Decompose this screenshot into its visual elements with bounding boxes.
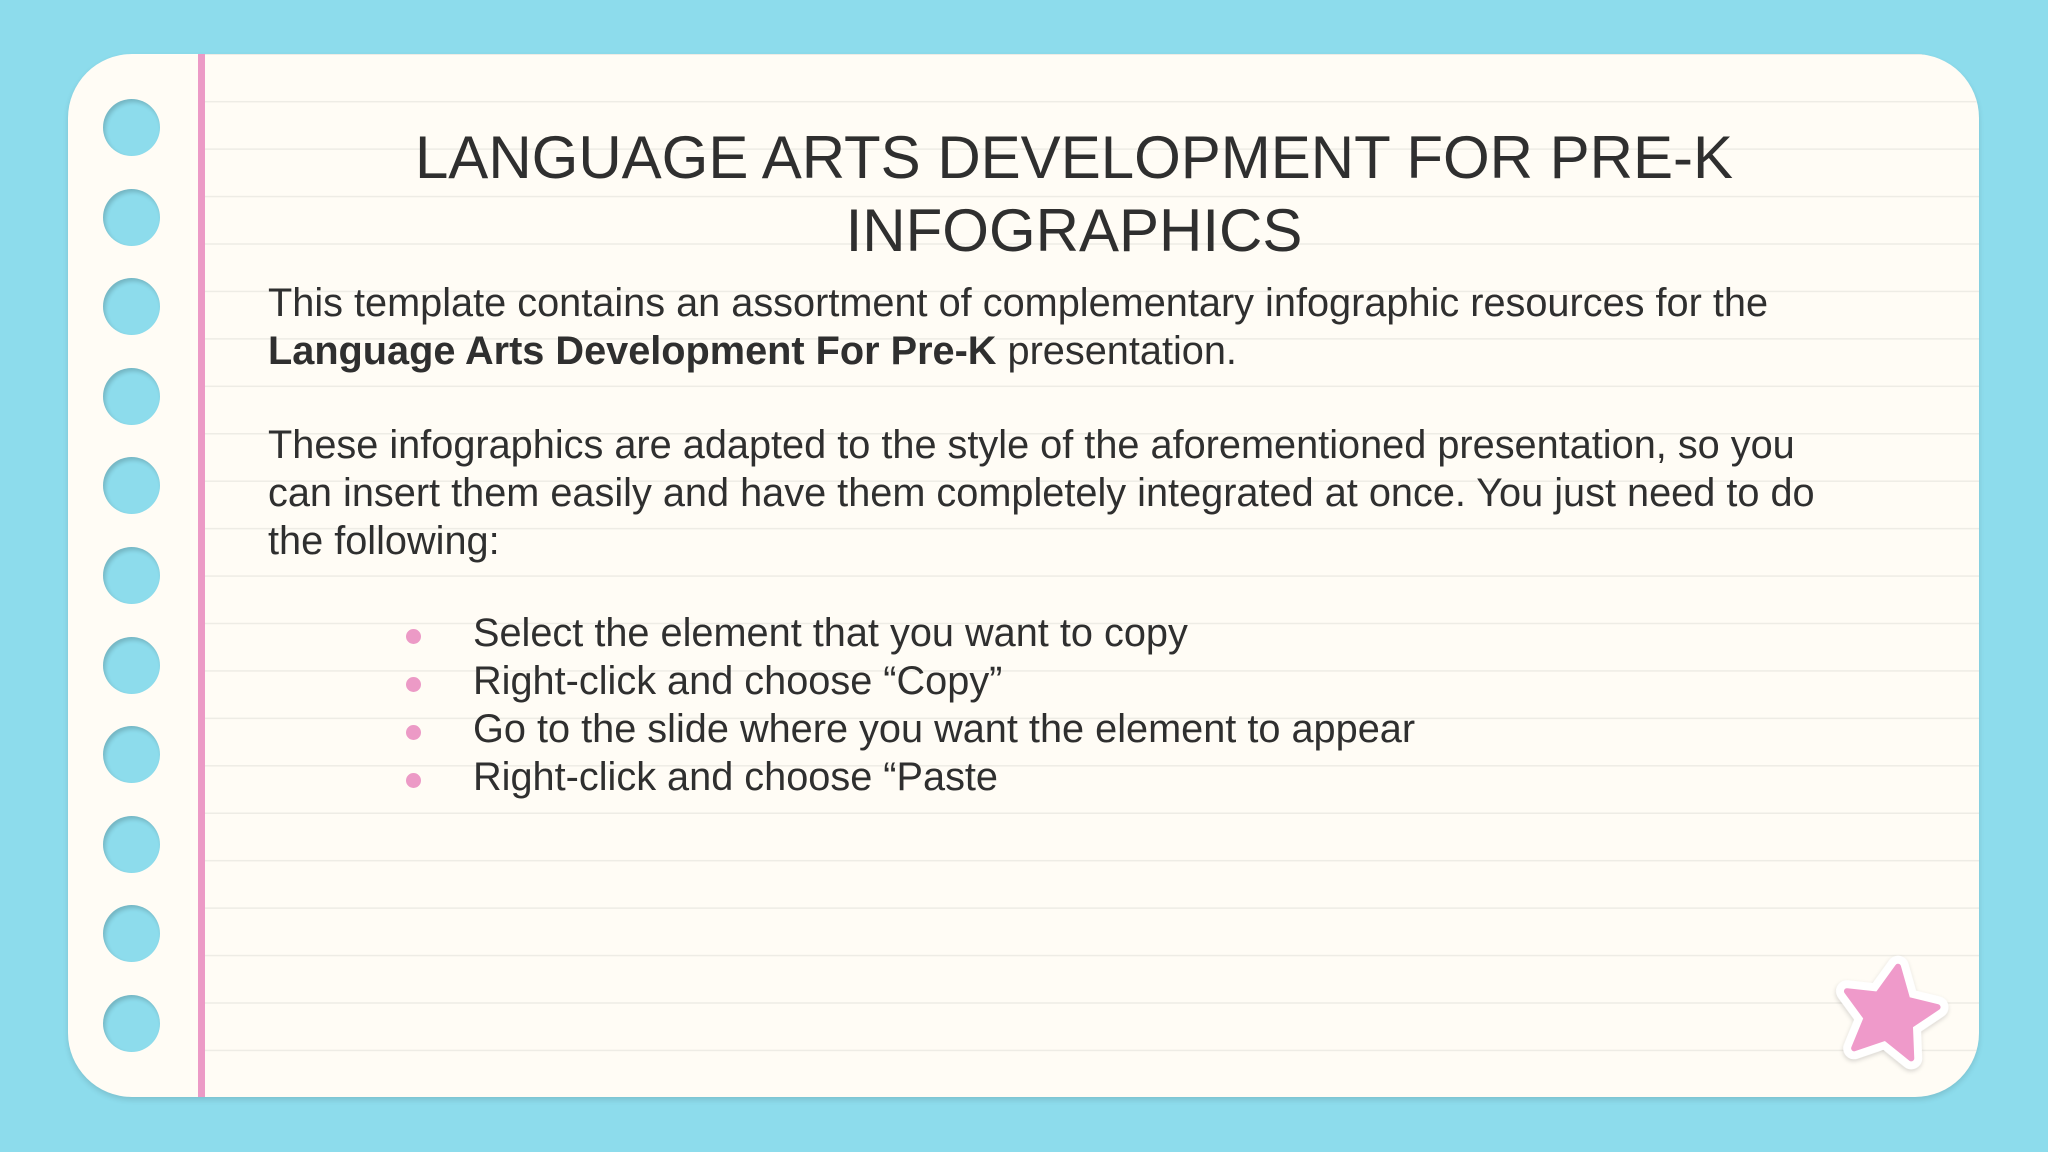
list: steps: Go to the slide where you want the element to appear <box>473 707 1415 751</box>
title: LANGUAGE ARTS DEVELOPMENT FOR PRE-K <box>415 124 1733 191</box>
text block: intro <box>268 281 1768 373</box>
title <box>415 124 1733 264</box>
list: steps: Right-click and choose “Paste <box>473 755 998 799</box>
text block: intro: This template contains an assortment of complementary infographic resources for the <box>268 281 1768 325</box>
text block: instructions <box>268 423 1815 563</box>
list: steps: Select the element that you want to copy <box>473 611 1188 655</box>
icon: binder holes <box>103 99 160 1052</box>
list: steps <box>406 611 1415 799</box>
text block: intro: Language Arts Development For Pre-K presentation. <box>268 329 1237 373</box>
list: steps: Right-click and choose “Copy” <box>473 659 1002 703</box>
title: INFOGRAPHICS <box>846 197 1302 264</box>
icon: pink star <box>1834 956 1950 1073</box>
text block: instructions: can insert them easily and have them completely integrated at once. You just need to do <box>268 471 1815 515</box>
text block: instructions: the following: <box>268 519 500 563</box>
text block: instructions: These infographics are adapted to the style of the aforementioned presentation, so you <box>268 423 1795 467</box>
